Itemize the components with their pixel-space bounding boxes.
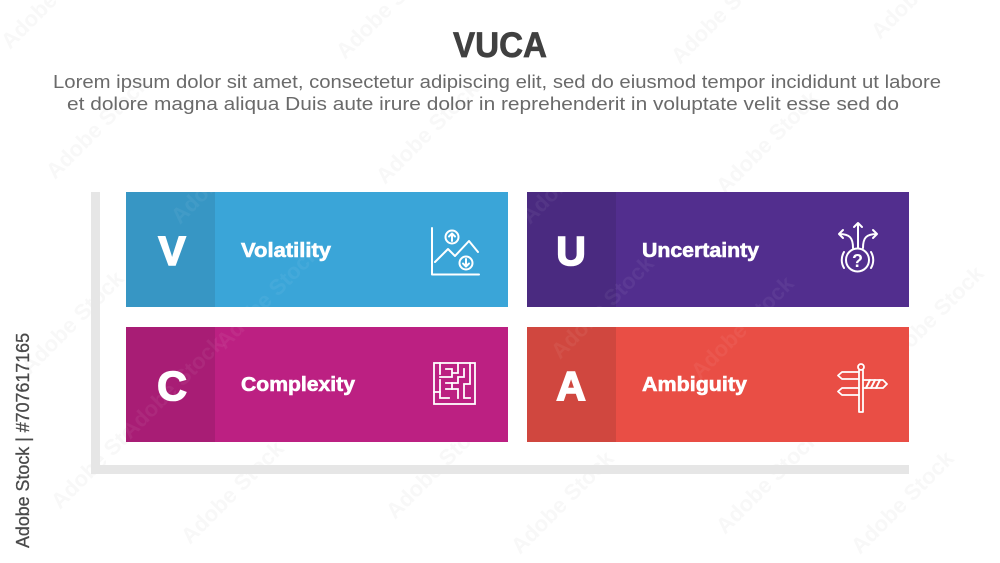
description text: et dolore magna aliqua Duis aute irure dolor in reprehenderit in voluptate velit esse sed do <box>67 93 899 114</box>
letter A: A <box>556 363 586 409</box>
text: Adobe Stock <box>711 85 824 199</box>
description text: Lorem ipsum dolor sit amet, consectetur adipiscing elit, sed do eiusmod tempor incididunt ut labore <box>53 71 941 92</box>
icon: branching arrows with question mark <box>839 223 877 272</box>
description text <box>53 71 941 114</box>
icon: line chart with up and down arrows <box>432 228 479 274</box>
text: Adobe Stock <box>546 250 659 364</box>
text: Adobe Stock <box>116 330 229 444</box>
icon: maze <box>434 363 475 404</box>
title: VUCA <box>453 26 547 65</box>
label: ambiguity: Ambiguity <box>642 374 748 396</box>
text: Adobe Stock <box>371 75 484 189</box>
panel: complexity <box>126 327 508 442</box>
letter C: C <box>157 363 187 409</box>
letter U: U <box>556 228 586 274</box>
label: complexity: Complexity <box>241 374 356 396</box>
vertical stock id text: Adobe Stock | #707617165 <box>13 333 33 548</box>
text: Adobe Stock <box>686 270 799 384</box>
label: volatility: Volatility <box>241 240 332 262</box>
text: Adobe Stock <box>46 400 159 514</box>
text: Adobe Stock <box>211 240 324 354</box>
text: Adobe Stock <box>41 70 154 184</box>
text: Adobe Stock <box>16 265 129 379</box>
panel: volatility <box>126 192 508 307</box>
letter V: V <box>158 228 186 274</box>
icon: signpost <box>838 364 887 412</box>
text: Adobe Stock <box>876 260 989 374</box>
panel: ambiguity <box>527 327 909 442</box>
text: Adobe Stock <box>516 115 629 229</box>
text: Adobe Stock <box>176 435 289 549</box>
text: Adobe Stock <box>381 410 494 524</box>
text: Adobe Stock <box>166 115 279 229</box>
icon glyph: question mark: ? <box>852 251 863 271</box>
text: Adobe Stock <box>506 445 619 559</box>
label: uncertainty: Uncertainty <box>642 240 760 262</box>
L-shaped axis frame <box>91 192 909 474</box>
text: Adobe Stock <box>711 425 824 539</box>
text: Adobe Stock <box>846 445 959 559</box>
panel: uncertainty <box>527 192 909 307</box>
